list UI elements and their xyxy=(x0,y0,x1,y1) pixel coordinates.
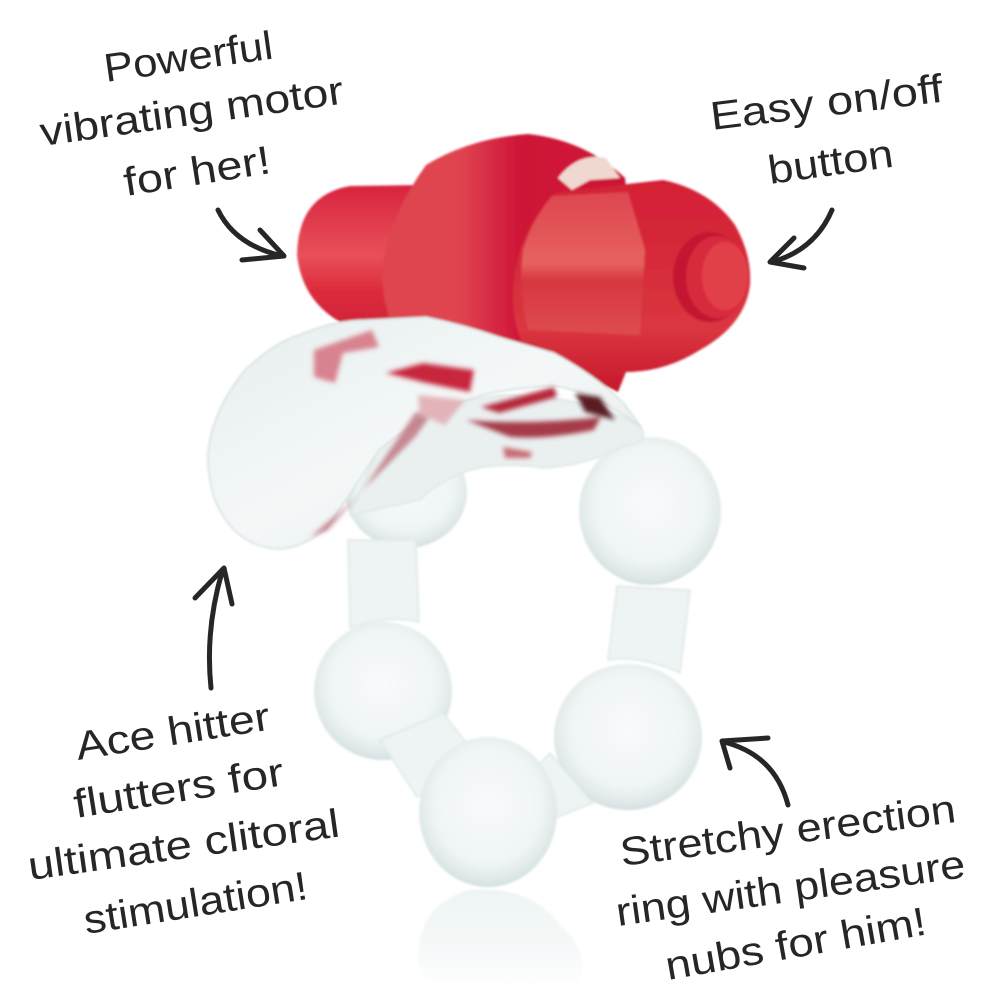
label: stretchy ring xyxy=(613,787,968,989)
label: stretchy ring: ring with pleasure xyxy=(613,842,968,935)
bottom reflection xyxy=(418,889,582,987)
label: ace hitter: Ace hitter xyxy=(73,695,273,769)
tongue blade xyxy=(208,317,641,549)
front facet panel xyxy=(521,192,645,335)
arch red reflections xyxy=(466,387,615,458)
ace hitter tongue xyxy=(208,317,643,549)
arrow: to motor xyxy=(218,210,284,260)
label: ace hitter xyxy=(25,695,342,943)
label: ace hitter: ultimate clitoral xyxy=(25,802,342,889)
housing highlight xyxy=(558,157,620,190)
label: easy on/off button: Easy on/off xyxy=(708,67,946,139)
label: ace hitter: stimulation! xyxy=(81,864,311,943)
arrow: to ace hitter xyxy=(195,568,232,688)
tongue underside arch xyxy=(350,395,643,515)
motor bullet front xyxy=(513,180,750,392)
tongue red smudges xyxy=(310,330,474,537)
label: easy on/off button: button xyxy=(765,132,896,193)
power button xyxy=(673,232,748,322)
motor housing xyxy=(382,134,640,360)
arrow: to ring xyxy=(722,738,788,805)
nub: bottom xyxy=(419,737,557,887)
nub: upper right xyxy=(579,437,721,585)
motor bullet rear xyxy=(297,185,420,325)
label: easy on/off button xyxy=(708,67,946,193)
label: stretchy ring: nubs for him! xyxy=(662,900,930,989)
label: powerful vibrating motor: for her! xyxy=(121,138,274,205)
nub: upper left xyxy=(345,436,467,548)
label: ace hitter: flutters for xyxy=(71,750,287,827)
ring band segments xyxy=(348,540,690,827)
nub: lower right xyxy=(554,664,702,810)
arrow: to button xyxy=(770,210,832,268)
label: powerful vibrating motor: Powerful xyxy=(101,24,276,91)
product: vibrating ring xyxy=(208,134,750,987)
label: powerful vibrating motor: vibrating motor xyxy=(37,69,346,155)
label: stretchy ring: Stretchy erection xyxy=(617,787,958,875)
label: powerful vibrating motor xyxy=(37,24,346,205)
nub: lower left xyxy=(314,622,452,760)
